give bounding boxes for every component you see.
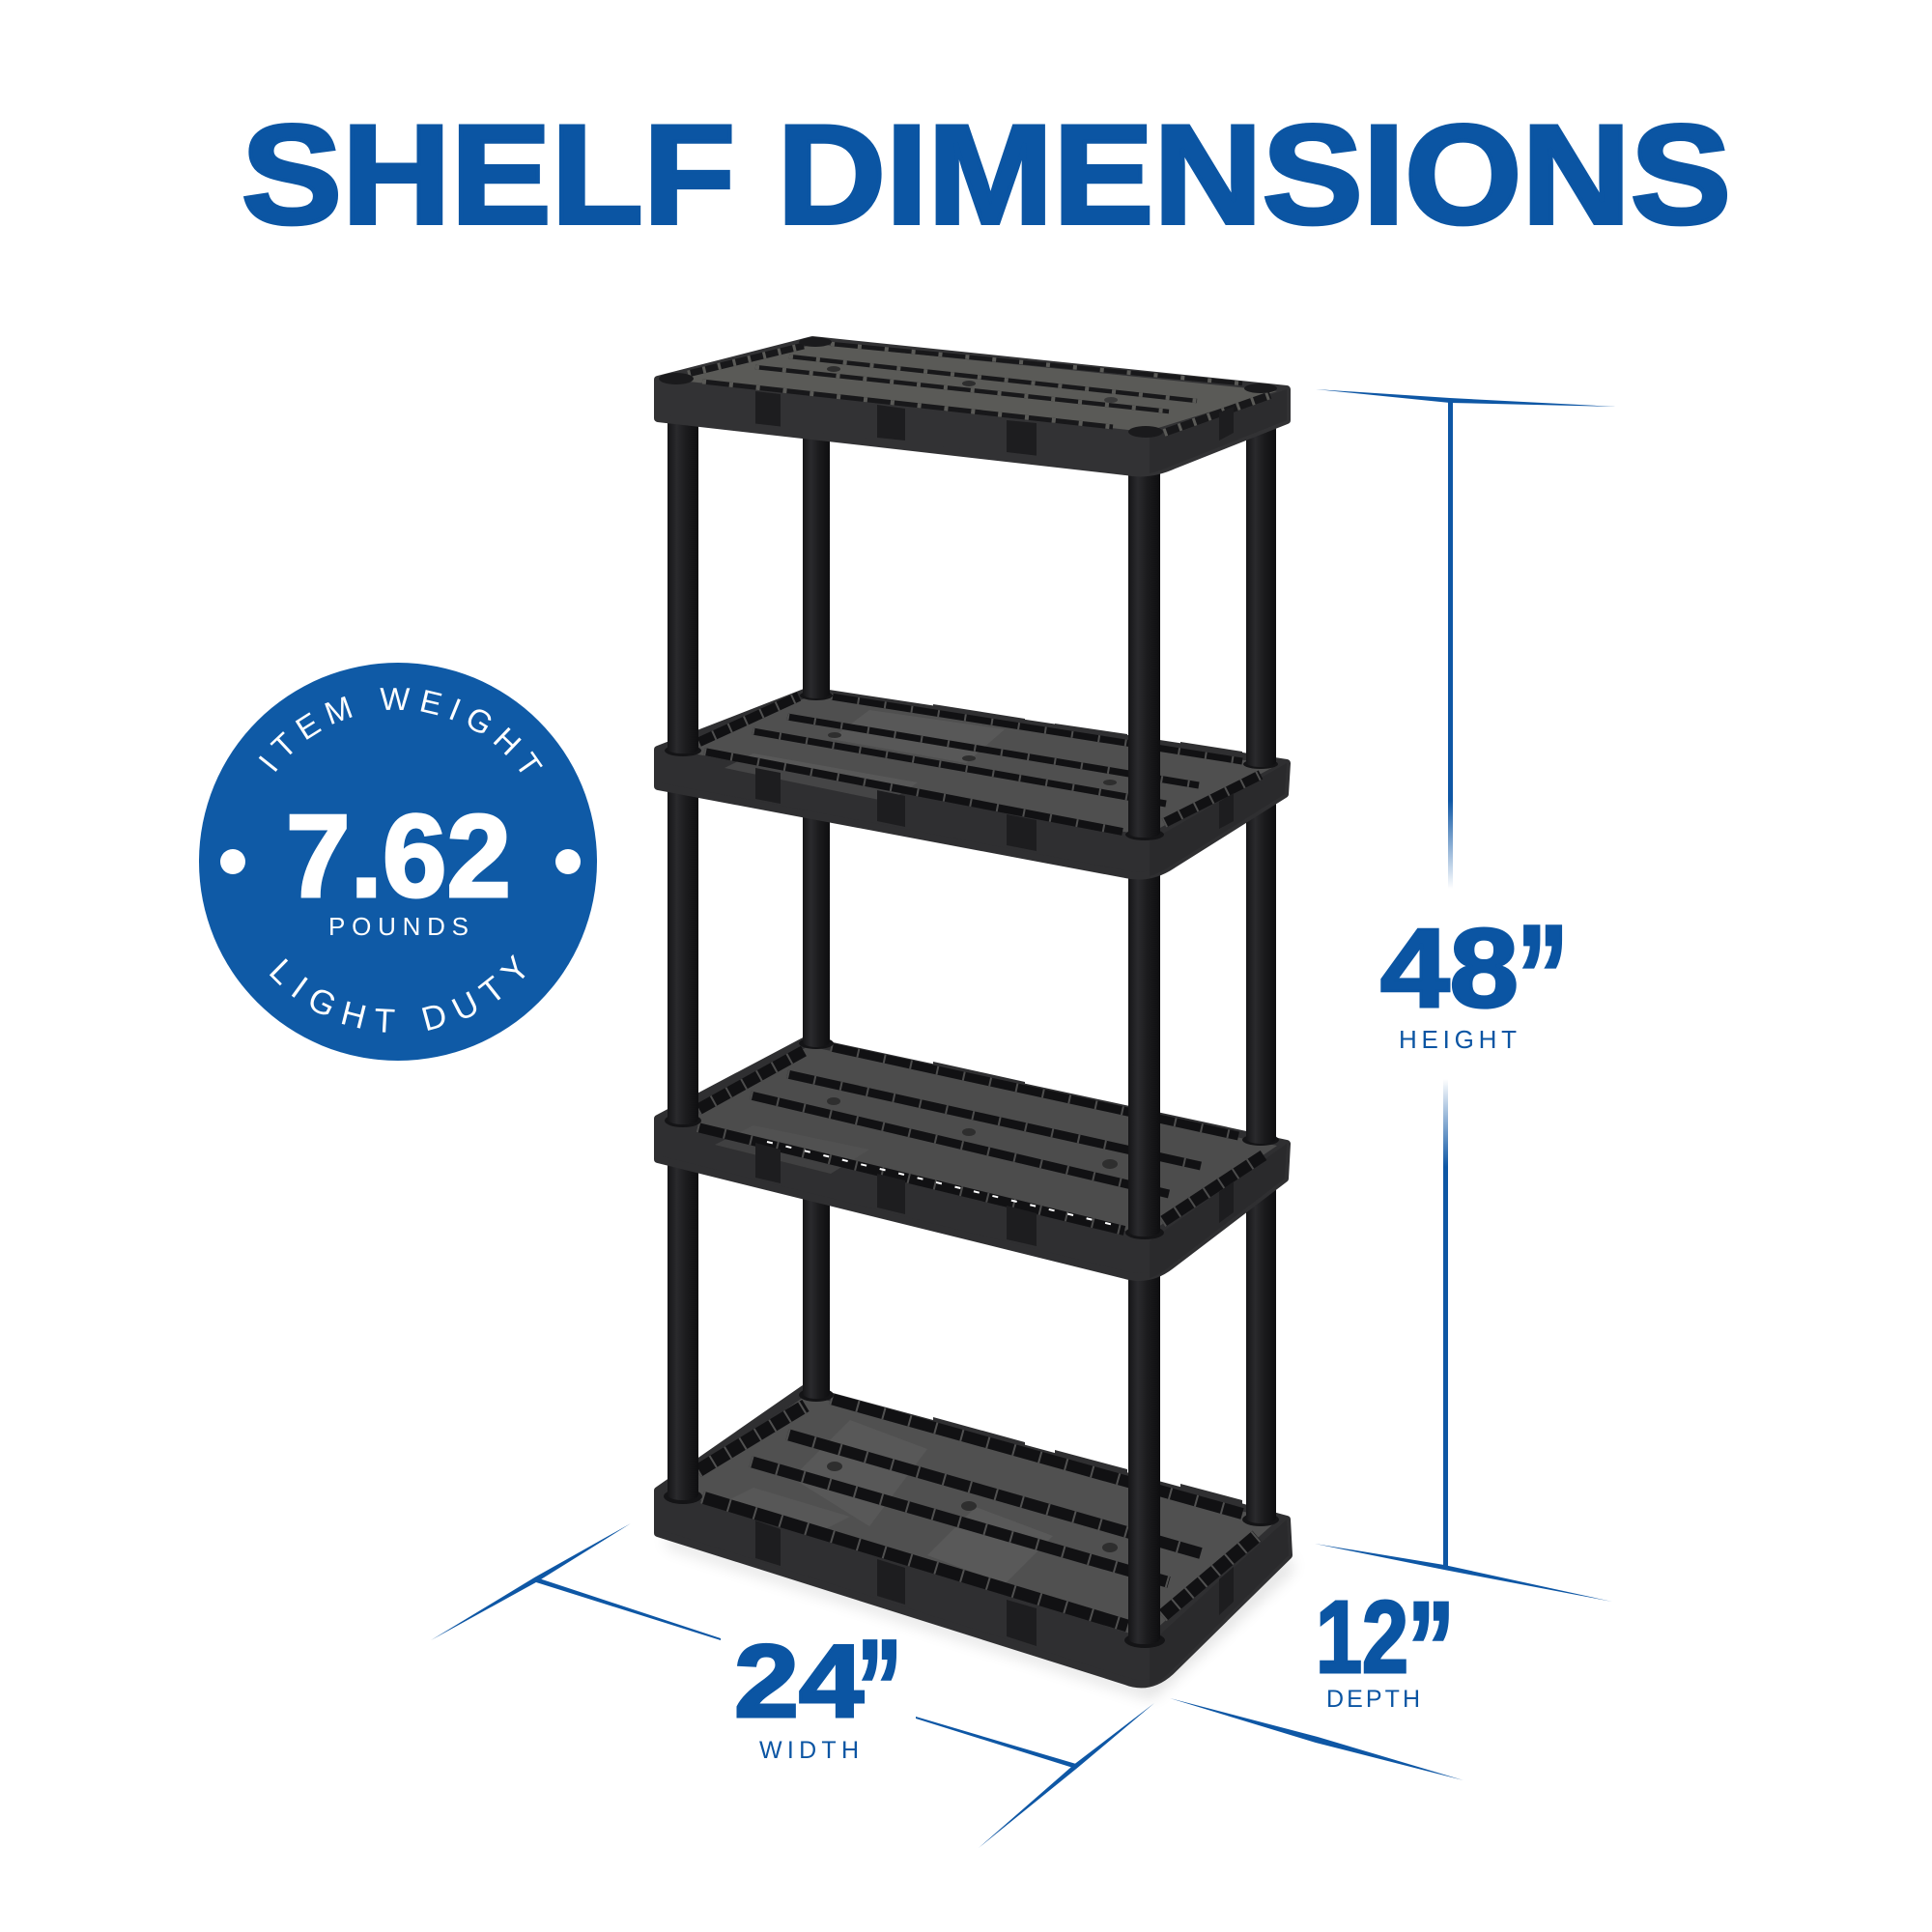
- width value: [734, 1611, 902, 1763]
- depth dimension: [1170, 1575, 1463, 1780]
- width guide: left tick: [431, 1523, 631, 1640]
- depth value: [1316, 1575, 1455, 1720]
- posts: bottom tier: [664, 1150, 1279, 1648]
- weight unit: POUNDS: [328, 912, 469, 941]
- third shelf: [658, 1040, 1287, 1278]
- depth guide: front tick: [1170, 1698, 1463, 1780]
- depth label: DEPTH: [1326, 1686, 1420, 1713]
- height guide: top tick: [1316, 389, 1616, 407]
- depth value: 12: [1316, 1580, 1408, 1694]
- width value: ”: [857, 1611, 902, 1763]
- posts: top tier: [665, 406, 1278, 840]
- bottom shelf: [658, 1389, 1289, 1686]
- curved label: light duty: LIGHT DUTY: [270, 954, 526, 1033]
- badge dot: right: [555, 849, 581, 874]
- depth value: ”: [1407, 1575, 1455, 1720]
- height guide: upper line: [1448, 400, 1453, 889]
- floor shadow: [667, 1536, 1293, 1698]
- second shelf: [658, 691, 1287, 876]
- badge dot: left: [220, 849, 245, 874]
- title: SHELF DIMENSIONS: [242, 96, 1731, 253]
- height guide: lower line: [1443, 1079, 1448, 1567]
- width value: 24: [734, 1623, 864, 1739]
- badge: item weight: [199, 663, 597, 1061]
- width guide: right tick: [979, 1703, 1154, 1848]
- width dimension: [431, 1523, 1154, 1848]
- height value: ”: [1517, 895, 1569, 1057]
- height guide: bottom tick: [1315, 1544, 1612, 1602]
- height value: [1380, 895, 1569, 1057]
- width guide: right line: [916, 1717, 1076, 1769]
- height value: 48: [1380, 905, 1519, 1031]
- height label: HEIGHT: [1399, 1025, 1517, 1054]
- width guide: left line: [536, 1577, 721, 1640]
- posts: middle tier: [665, 773, 1279, 1239]
- weight value: 7.62: [286, 790, 511, 922]
- badge circle: [199, 663, 597, 1061]
- top shelf: [658, 337, 1287, 473]
- width label: WIDTH: [759, 1737, 859, 1764]
- shelf unit illustration: [658, 337, 1293, 1698]
- height dimension: [1315, 389, 1616, 1602]
- curved label: item weight: ITEM WEIGHT: [259, 688, 543, 773]
